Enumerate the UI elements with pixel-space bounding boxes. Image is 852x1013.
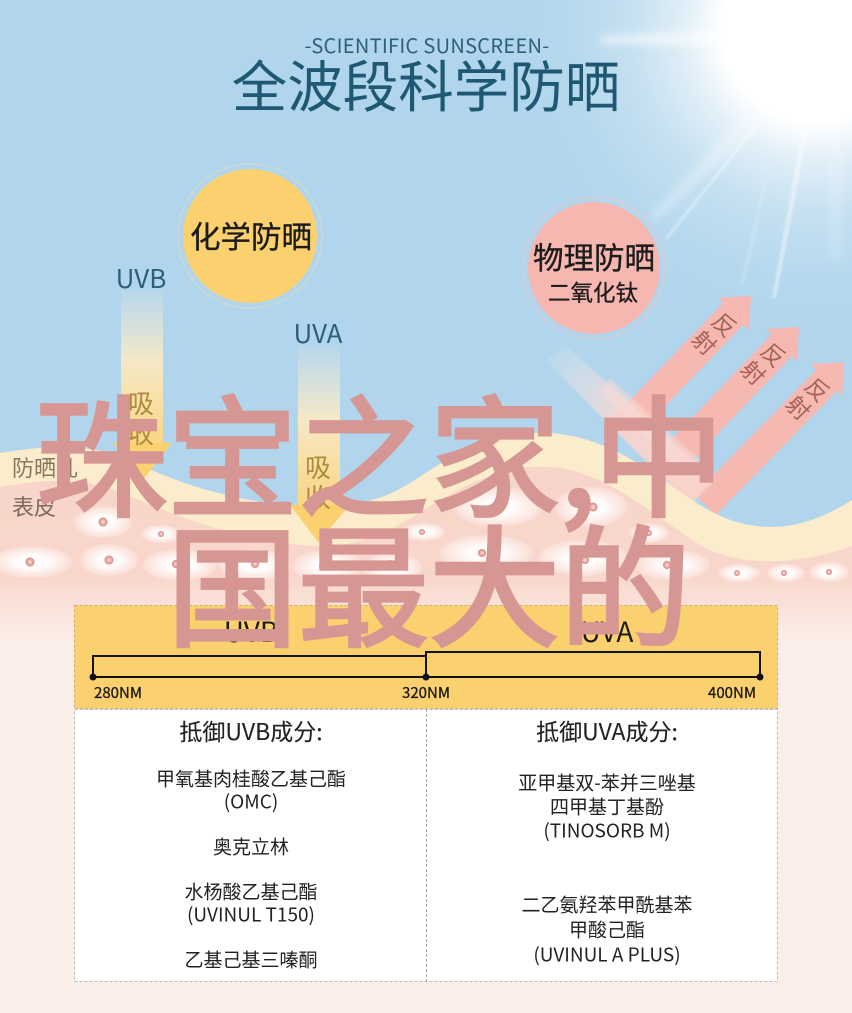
arrow: reflect 1: 反 — [705, 303, 746, 344]
arrow: UVA absorbed — [290, 345, 350, 542]
circle: physical sunscreen: 物理防晒 — [533, 234, 655, 278]
arrow: reflect 2: 射 — [734, 351, 775, 392]
column: UVA ingredients: 二乙氨羟苯甲酰基苯 — [521, 890, 693, 918]
watermark overlay text: 国最大的 — [167, 484, 691, 674]
column: UVA ingredients: (UVINUL A PLUS) — [533, 940, 681, 968]
arrow: UVB absorbed: 吸 — [128, 384, 154, 421]
arrow: UVA absorbed: 收 — [305, 478, 331, 515]
wavelength bracket — [93, 652, 760, 677]
column: UVA ingredients: (TINOSORB M) — [543, 816, 671, 844]
column: UVA ingredients: 亚甲基双-苯并三唑基 — [518, 768, 696, 796]
watermark overlay text — [36, 354, 724, 674]
skin cells — [0, 487, 849, 583]
arrow: UVB absorbed — [113, 290, 172, 480]
arrow: reflect 2: 反 — [754, 333, 795, 374]
arrow: reflect 3 — [694, 362, 844, 516]
sun glow with rays — [505, 0, 852, 340]
ingredient table panel — [74, 709, 778, 982]
wavelength header band: 320NM — [402, 682, 450, 703]
arrow: UVB absorbed: 收 — [128, 414, 154, 451]
column: UVB ingredients: 抵御UVB成分: — [179, 713, 323, 747]
column: UVB ingredients: 水杨酸乙基己酯 — [184, 878, 318, 904]
column: UVA ingredients: 甲酸己酯 — [569, 916, 645, 942]
column: UVB ingredients: 乙基己基三嗪酮 — [184, 946, 318, 972]
lower page background — [0, 640, 852, 1013]
arrow: reflect 3: 反 — [798, 368, 839, 409]
circle: chemical sunscreen: 化学防晒 — [190, 213, 312, 257]
skin layer — [0, 467, 852, 640]
wavelength header band: UVB — [224, 611, 278, 651]
arrow: reflect 1 — [610, 296, 751, 442]
incoming light beams — [545, 345, 715, 505]
column: UVB ingredients: 甲氧基肉桂酸乙基己酯 — [156, 764, 346, 792]
label: UVA: UVA — [293, 314, 343, 351]
column: UVA ingredients — [518, 713, 696, 968]
subtitle: -SCIENTIFIC SUNSCREEN- — [304, 30, 550, 59]
column: UVB ingredients: (OMC) — [224, 788, 278, 814]
circle: chemical sunscreen — [178, 164, 322, 308]
sunscreen layer — [0, 433, 852, 620]
wavelength header band: UVA — [581, 611, 633, 651]
arrow: reflect 1: 射 — [685, 321, 726, 362]
column: UVA ingredients: 抵御UVA成分: — [536, 713, 678, 747]
label: sunscreen layer: 防晒乳 — [12, 451, 78, 483]
column: UVB ingredients: (UVINUL T150) — [187, 900, 315, 928]
circle: physical sunscreen — [523, 197, 665, 339]
label: UVB: UVB — [116, 259, 166, 296]
column: UVB ingredients — [156, 713, 346, 972]
wavelength header band: 280NM — [94, 682, 142, 703]
column: UVB ingredients: 奥克立林 — [213, 832, 289, 860]
label: epidermis: 表皮 — [12, 490, 56, 522]
arrow: UVA absorbed: 吸 — [305, 448, 331, 485]
arrow: reflect 2 — [670, 327, 799, 462]
wavelength header band — [74, 606, 778, 708]
wavelength header band: 400NM — [708, 682, 756, 703]
circle: physical sunscreen: 二氧化钛 — [548, 276, 638, 308]
title: 全波段科学防晒 — [232, 43, 620, 123]
column: UVA ingredients: 四甲基丁基酚 — [550, 792, 664, 820]
arrow: reflect 3: 射 — [779, 386, 820, 427]
watermark overlay text: 珠宝之家,中 — [36, 354, 724, 544]
